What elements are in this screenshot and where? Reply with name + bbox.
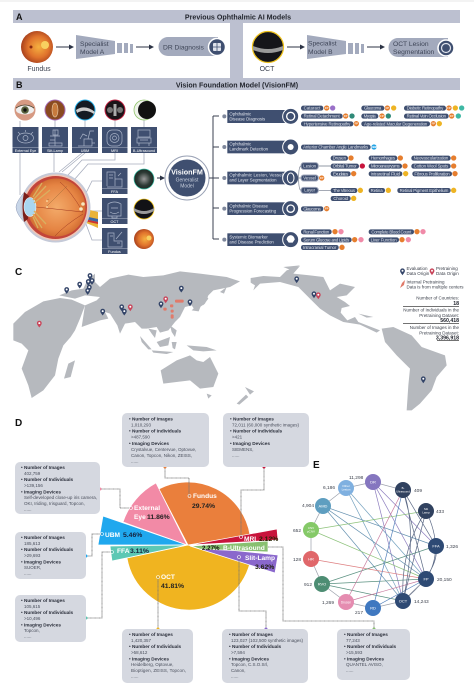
node: FP: [418, 571, 434, 587]
diagnosis tag labels: Retinal Detachment: [304, 114, 340, 119]
device: MRI: MRI: [111, 149, 118, 153]
dataset statistics: Number of Images in the: [410, 325, 459, 330]
pie labels: B-Ultrasound: [223, 545, 265, 552]
node: other: Other: [342, 484, 350, 488]
VisionFM generalist model: Model: [180, 184, 194, 190]
callout: fundus: • Number of Individuals: [129, 428, 182, 434]
callout: FFA: Topcon,: [24, 628, 40, 633]
OCT input: [252, 32, 284, 73]
specialist model B: Specialist: [308, 40, 337, 48]
callout: UBM: ......: [24, 571, 32, 576]
diagnosis tag labels: Age-related Macular Degeneration: [364, 121, 428, 126]
node: RD: RD: [370, 606, 376, 610]
segmentation tag labels: The Vitreous: [333, 188, 355, 193]
node counts: 11,298: [349, 475, 364, 481]
pie labels: 2.12%: [259, 536, 278, 543]
node: FFA: FFA: [432, 544, 440, 548]
segmentation category labels: Lesion: [303, 163, 317, 168]
node counts: 1,269: [322, 600, 334, 606]
segmentation tag labels: Drusen: [333, 156, 347, 161]
node: drusen: Drusen: [341, 600, 351, 604]
node: FP: FP: [423, 576, 429, 582]
diagnosis tag labels: Cataract: [304, 106, 321, 111]
pie labels: 3.62%: [255, 564, 274, 571]
diagnosis tag labels: Glaucoma: [364, 106, 382, 111]
node: OCT: [395, 593, 411, 609]
thumbnail: MRI: [105, 100, 125, 120]
node: HR: HR: [308, 556, 314, 562]
device: fundus: [102, 228, 128, 254]
node counts: 4,904: [302, 503, 314, 509]
task: landmark detection: [222, 139, 299, 155]
pie labels: UBM: [105, 532, 121, 539]
heading: panel A: Previous Ophthalmic AI Models: [185, 14, 291, 22]
dataset statistics: Number of Individuals in the: [403, 308, 459, 312]
pie labels: Fundus: [193, 493, 217, 500]
callout: slit-lamp: ......: [231, 674, 239, 679]
dataset statistics: 3,396,918: [436, 336, 459, 342]
callout: FFA: • Number of Images: [21, 598, 65, 603]
node: slit-lamp: Lamp: [422, 510, 430, 514]
callout: fundus: Crystalvue, Centervue, Optovue,: [131, 447, 196, 452]
task: landmark detection: Ophthalmic: [229, 142, 252, 147]
diagnosis tag labels: Hypertensive Retinopathy: [304, 121, 351, 126]
heading: panel A: [13, 10, 460, 23]
callout: B-ultrasound: • Imaging Devices: [344, 656, 384, 662]
callout: external eye: • Number of Images: [21, 465, 65, 470]
task: segmentation: [222, 170, 299, 186]
callout: MRI: ......: [232, 453, 240, 458]
segmentation tag labels: Retina: [371, 188, 383, 193]
device: UBM: UBM: [81, 149, 89, 153]
callout: fundus: • Imaging Devices: [129, 441, 169, 446]
modality dots: FP: [325, 106, 329, 110]
OCT lesion segmentation output: OCT Lesion: [393, 41, 429, 48]
callout: MRI: [223, 413, 309, 467]
map legend: Evaluation: [406, 266, 428, 271]
task: disease diagnosis: Disease Diagnosis: [229, 116, 265, 121]
network edges: [311, 482, 436, 608]
VisionFM generalist model: Generalist: [176, 178, 199, 184]
device: fundus: Fundus: [108, 250, 121, 254]
callout: slit-lamp: • Number of Images: [229, 632, 273, 637]
map legend: Internal Pretraining: [406, 280, 445, 284]
callout: OCT: [122, 629, 193, 683]
node counts: 217: [355, 610, 363, 616]
callout: FFA: 105,615: [24, 604, 41, 609]
callout: fundus: >487,590: [131, 434, 150, 440]
callout: OCT: • Number of Individuals: [129, 644, 182, 649]
panel: world map: [13, 265, 464, 410]
modality dots: FP: [450, 114, 454, 118]
heading: panel D: D: [15, 418, 22, 429]
modality dots: FP: [380, 114, 384, 118]
node: CNV: CNV: [308, 526, 314, 530]
segmentation tag labels: Retinal Pigment Epithelium: [400, 188, 449, 193]
fundus input: Fundus: [27, 66, 51, 73]
node counts: 409: [414, 488, 422, 494]
node counts: 433: [436, 509, 444, 515]
callout: external eye: 402,759: [24, 471, 41, 476]
task: systemic biomarker: and Disease Prediction: [229, 239, 274, 244]
segmentation category labels: Vessel: [303, 175, 316, 180]
systemic tag labels: Renal Function: [303, 229, 330, 234]
systemic dots: [332, 229, 426, 250]
segmentation tag labels: Orbital Tumor: [333, 164, 357, 169]
network nodes: [303, 474, 444, 616]
callout: external eye: • Imaging Devices: [21, 490, 61, 494]
panel: dataset distribution: [15, 413, 410, 683]
task: progression forecasting: [222, 201, 299, 217]
callout: MRI: • Imaging Devices: [230, 441, 270, 446]
callout: FFA: ......: [24, 634, 32, 639]
map legend: [400, 266, 464, 290]
thumbnail: slit-lamp: [45, 100, 65, 120]
callout: OCT: Bioptigen, ZEISS, Topcon,: [131, 668, 186, 673]
segmentation tag labels: Microaneurysms: [371, 164, 400, 169]
arrow: [56, 46, 73, 48]
pie labels: 2.27%: [202, 545, 220, 552]
map legend: Data Origin: [406, 271, 430, 276]
systemic tag labels: Serum Glucose and Lipids: [303, 237, 349, 242]
node: B-ultrasound: B-: [402, 486, 404, 490]
segmentation category tags: [301, 163, 318, 193]
modality dots: FP: [447, 106, 451, 110]
diagnosis tags: [301, 106, 449, 126]
node: other: Lesion: [342, 488, 351, 492]
landmark tag: UBM: [371, 145, 378, 149]
callout: external eye: >139,156: [24, 483, 43, 488]
callout: B-ultrasound: [337, 629, 410, 680]
callout: B-ultrasound: QUANTEL AVISO,: [346, 662, 383, 667]
pie labels: Eye: [134, 514, 146, 521]
node: CNV: [303, 522, 319, 538]
pie labels: OCT: [161, 574, 175, 581]
sub-branches: [299, 166, 331, 190]
heading: panel B: Vision Foundation Model (VisionFM): [176, 82, 299, 90]
systemic tag labels: Complete Blood Count: [371, 229, 412, 234]
pie labels: 29.74%: [192, 503, 215, 510]
callout: external eye: OKI, Iriding, Irisguard, Topcon,: [24, 501, 85, 506]
callout: FFA: >10,496: [24, 616, 41, 621]
node: slit-lamp: [418, 503, 434, 519]
thumbnail: fundus: [134, 229, 154, 249]
device: slit-lamp: Slit-Lamp: [47, 149, 63, 153]
device: MRI: [102, 127, 128, 153]
callout: OCT: 1,420,357: [131, 638, 152, 643]
node: RVO: RVO: [318, 582, 326, 586]
pie labels: 3.11%: [130, 548, 149, 555]
callout: B-ultrasound: >15,593: [346, 650, 363, 655]
node counts: 652: [293, 528, 301, 534]
segmentation tag labels: Cotton Wool Spots: [414, 164, 448, 169]
callout: slit-lamp: Canon,: [231, 668, 246, 673]
connector endpoints: [84, 466, 376, 630]
callout: slit-lamp: >7,594: [231, 650, 245, 655]
task tree: [222, 105, 464, 250]
DR diagnosis output: [158, 37, 226, 56]
node: DR: DR: [370, 480, 376, 484]
task: landmark detection: Landmark Detection: [229, 147, 269, 152]
tree connector: [209, 116, 219, 239]
callout: UBM: • Imaging Devices: [21, 560, 61, 564]
callout: MRI: • Number of Individuals: [230, 428, 283, 434]
task: progression forecasting: Progression Forecasting: [229, 208, 277, 213]
task: segmentation: Ophthalmic Lesion, Vessel: [229, 173, 283, 178]
node: RD: [365, 600, 381, 616]
pie labels: [105, 493, 278, 590]
segmentation tag labels: Fibrous Proliferation: [414, 171, 450, 176]
map markers: internal centers: [163, 300, 184, 319]
callout: fundus: ......: [131, 459, 139, 464]
segmentation tag labels: Neovascularization: [414, 156, 449, 161]
dataset statistics: [403, 296, 459, 342]
node: RVO: [314, 576, 330, 592]
callout: UBM: 185,613: [24, 541, 41, 546]
map legend: Data is from multiple centers: [406, 284, 464, 290]
callout: FFA: • Number of Individuals: [21, 610, 74, 615]
connector lines: [20, 120, 144, 240]
OCT lesion segmentation output: Segmentation: [393, 49, 435, 56]
heading: panel B: B: [16, 80, 23, 90]
callout: MRI: 72,011 (60,000 synthetic images): [232, 422, 300, 428]
diagnosis tag labels: [304, 106, 447, 126]
systemic tag labels: Liver Function: [371, 237, 397, 242]
node: OCT: OCT: [399, 598, 408, 604]
VisionFM generalist model: VisionFM: [171, 168, 203, 176]
specialist model A: Model A: [80, 49, 105, 56]
diagnosis tag labels: Retinal Vein Occlusion: [407, 114, 447, 119]
callout: OCT: >58,612: [131, 650, 148, 655]
callout: external eye: [15, 462, 100, 514]
segmentation category labels: FP: [320, 176, 324, 180]
callout: slit-lamp: • Imaging Devices: [229, 656, 269, 662]
node counts: [293, 475, 458, 616]
arrow: [367, 46, 384, 48]
arrow: [136, 46, 153, 48]
segmentation dots: [348, 155, 458, 201]
callout: B-ultrasound: • Number of Images: [344, 632, 388, 637]
pie labels: Slit-Lamp: [245, 555, 275, 562]
callout: MRI: >421: [232, 434, 243, 440]
thumbnail: UBM: [75, 100, 95, 120]
node: B-ultrasound: Ultrasound: [396, 490, 410, 494]
heading: panel A: A: [16, 12, 23, 22]
specialist model B: Model B: [308, 49, 333, 56]
callout: UBM: • Number of Images: [21, 535, 65, 540]
callout: B-ultrasound: ......: [346, 668, 354, 673]
callout connectors: [86, 467, 374, 629]
task: disease diagnosis: Ophthalmic: [229, 111, 252, 116]
heading: panel B: [13, 78, 460, 90]
modality dots: FP: [432, 122, 435, 126]
callout: OCT: • Number of Images: [129, 632, 173, 637]
modality dots: FP: [386, 106, 389, 110]
callout: B-ultrasound: 77,243: [346, 638, 360, 643]
pie labels: 41.81%: [161, 583, 184, 590]
modality dots: [324, 105, 464, 126]
forecasting tag: Glaucoma: [303, 206, 321, 211]
heading: panel E: E: [313, 460, 320, 471]
map legend: Pretraining: [436, 266, 458, 271]
callout: external eye: • Number of Individuals: [21, 477, 74, 482]
pie labels: 5.46%: [123, 532, 142, 539]
segmentation category labels: Layer: [304, 188, 316, 193]
node: B-ultrasound: [395, 482, 411, 498]
segmentation tags: [331, 156, 452, 201]
arrow to VisionFM: [157, 177, 164, 179]
map landmasses: Americas, New Zealand: [237, 265, 447, 410]
panel: dataset network: [293, 460, 458, 616]
callout: fundus: • Number of Images: [129, 416, 173, 422]
panel: vision foundation model: [12, 78, 464, 254]
DR diagnosis output: DR Diagnosis: [163, 44, 205, 52]
VisionFM generalist model: [165, 156, 209, 200]
arrow: [287, 46, 304, 48]
node: CNV: pCNV: [307, 530, 315, 534]
dataset statistics: Pretraining Dataset:: [419, 330, 459, 336]
dataset statistics: 18: [453, 301, 459, 307]
dataset statistics: Number of Countries:: [416, 296, 459, 300]
node counts: 912: [304, 582, 312, 588]
node: drusen: [338, 594, 354, 610]
dataset statistics: Pretraining Dataset:: [419, 313, 459, 318]
device: slit-lamp: [42, 127, 68, 153]
callout: slit-lamp: Topcon, C.S.O.Srl,: [231, 662, 268, 667]
map pins: pretraining: [37, 292, 321, 327]
node: DR: [365, 474, 381, 490]
map pins: evaluation: [64, 273, 426, 383]
pie labels: External: [134, 505, 160, 512]
callout: OCT: Heidelberg, Optovue,: [131, 662, 174, 667]
landmark tag: Anterior Chamber Angle Landmarks: [303, 145, 368, 150]
callout: FFA: [15, 595, 86, 642]
callout: fundus: Canon, Topcon, Nikon, ZEISS,: [131, 453, 192, 458]
OCT lesion segmentation output: [388, 38, 454, 57]
segmentation category labels: [303, 163, 324, 193]
dataset statistics: 560,418: [440, 318, 459, 324]
task: disease diagnosis: [222, 108, 299, 124]
node: FFA: [428, 538, 444, 554]
thumbnail: external eye: [14, 100, 36, 120]
callout: OCT: ......: [131, 674, 139, 679]
node counts: 6,186: [323, 485, 335, 491]
pie labels: MRI: [244, 536, 256, 543]
systemic tags: [301, 229, 414, 250]
specialist model A: [76, 35, 133, 59]
callout: UBM: • Number of Individuals: [21, 547, 74, 552]
task: progression forecasting: Ophthalmic Disease: [229, 203, 269, 208]
forecasting tag: FP: [325, 207, 329, 211]
thumbnail: FFA: [134, 169, 154, 189]
device: OCT: OCT: [110, 220, 119, 224]
eye cross-section illustration: [16, 172, 98, 242]
systemic tag labels: Intracranial Tumor: [303, 245, 337, 250]
node counts: 14,243: [414, 599, 429, 605]
heading: panel C: C: [15, 267, 22, 278]
callout: slit-lamp: [222, 629, 308, 683]
thumbnail: OCT: [134, 199, 154, 219]
diagnosis tag labels: Diabetic Retinopathy: [407, 106, 444, 111]
callout: OCT: • Imaging Devices: [129, 656, 169, 662]
node: HR: [303, 551, 319, 567]
segmentation tag labels: Choroid: [333, 196, 349, 201]
segmentation tag labels: Hemorrhages: [371, 156, 395, 161]
callout: UBM: [15, 532, 86, 579]
callout: MRI: SIEMENS,: [232, 447, 254, 452]
specialist model B: [307, 35, 364, 59]
segmentation tag labels: Exudates: [333, 171, 348, 176]
node: other: [338, 480, 354, 496]
device: B-ultrasound: B-Ultrasound: [133, 149, 155, 153]
callout: slit-lamp: 123,027 (102,500 synthetic images): [231, 638, 304, 643]
callout: MRI: • Number of Images: [230, 416, 274, 422]
segmentation tag labels: Intraretinal Fluid: [371, 171, 401, 176]
device: FFA: [102, 168, 128, 194]
pie chart: [98, 482, 278, 610]
task: segmentation: and Layer Segmentation: [229, 178, 277, 183]
pie labels: FFA: [117, 548, 130, 555]
diagnosis tag labels: Myopia: [364, 114, 376, 119]
modality dots: FP: [344, 114, 348, 118]
specialist model A: Specialist: [80, 41, 109, 48]
node counts: 20,150: [437, 577, 452, 583]
node: AMD: AMD: [319, 504, 328, 508]
OCT input: OCT: [260, 66, 275, 73]
callout: external eye: ......: [24, 507, 32, 512]
systemic tag labels: [303, 229, 412, 250]
map landmasses: Africa, Eurasia, Australia: [13, 271, 240, 399]
node counts: 128: [293, 557, 301, 563]
node: slit-lamp: Slit: [424, 507, 428, 511]
device: external eye: External Eye: [15, 149, 36, 153]
device: external eye: [12, 127, 38, 153]
device: FFA: FFA: [111, 190, 118, 194]
node: AMD: [315, 498, 331, 514]
modality dots: FP: [355, 122, 358, 126]
map legend: Data Origin: [436, 271, 459, 276]
callout: FFA: • Imaging Devices: [21, 622, 61, 628]
callout: fundus: [122, 413, 209, 467]
node counts: 1,326: [446, 544, 458, 550]
forecasting tag: [301, 206, 329, 211]
thumbnail: B-ultrasound: [134, 100, 156, 120]
callout: slit-lamp: • Number of Individuals: [229, 644, 282, 649]
task: systemic biomarker: Systemic Biomarker: [229, 234, 268, 239]
fundus input: [21, 31, 53, 73]
device: UBM: [72, 127, 98, 153]
callout: UBM: >29,693: [24, 553, 41, 558]
callout: external eye: Self-developed close-up iris camera,: [24, 495, 97, 500]
segmentation tag labels: [333, 156, 450, 201]
task: systemic biomarker: [222, 232, 299, 248]
panel: previous ophthalmic AI models: [13, 10, 460, 79]
callout: UBM: SUOER,: [24, 565, 41, 570]
device: OCT: [102, 198, 128, 224]
device: B-ultrasound: [131, 127, 157, 153]
pie labels: 11.86%: [147, 514, 170, 521]
callout: B-ultrasound: • Number of Individuals: [344, 644, 397, 649]
callout: fundus: 1,010,293: [131, 422, 152, 428]
